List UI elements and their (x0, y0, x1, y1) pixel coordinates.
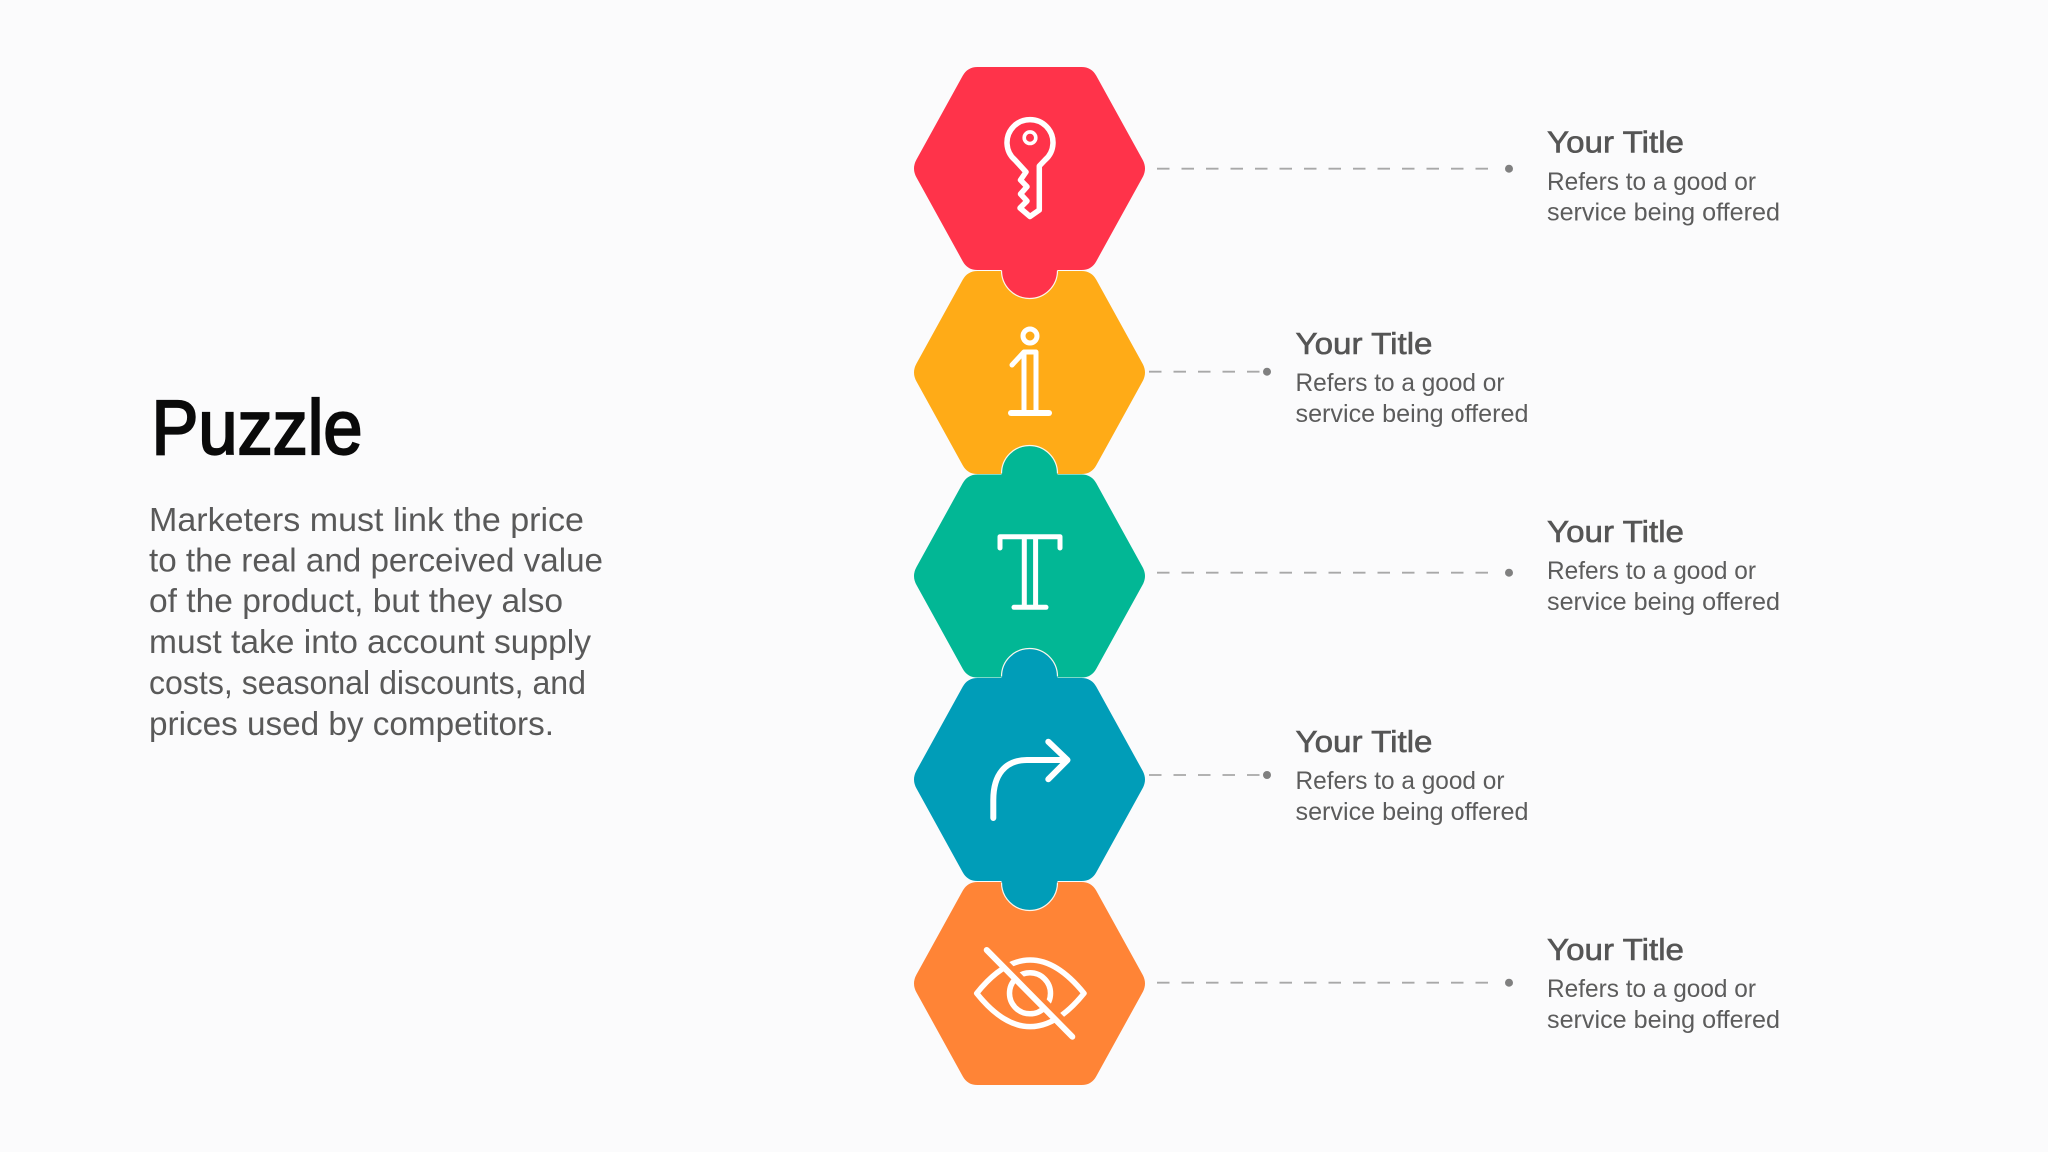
label 5 (1547, 932, 1780, 1034)
intro paragraph: costs, seasonal discounts, and (149, 664, 586, 701)
intro paragraph: prices used by competitors. (149, 705, 554, 742)
icon: key (1007, 120, 1053, 216)
puzzle tab: blue into green (1002, 648, 1058, 679)
hexagon: orange (914, 882, 1145, 1085)
hexagon: blue (914, 678, 1145, 881)
intro paragraph (149, 501, 603, 742)
connector 4 (1149, 771, 1271, 779)
intro paragraph: of the product, but they also (149, 582, 563, 619)
connector 2 (1149, 368, 1271, 376)
label 1: service being offered (1547, 198, 1780, 226)
connector 3 (1157, 569, 1513, 577)
label 1 (1547, 125, 1780, 226)
icon: info (1011, 329, 1049, 413)
icon: turn arrow (993, 742, 1068, 818)
label 3 (1547, 514, 1780, 616)
label 2: Refers to a good or (1296, 369, 1504, 397)
label 4: Refers to a good or (1296, 767, 1504, 795)
connector 5 (1157, 979, 1513, 987)
puzzle tab: blue into orange (1002, 880, 1058, 911)
hexagon: green (914, 474, 1145, 678)
intro paragraph: Marketers must link the price (149, 501, 584, 538)
connector 1 (1157, 165, 1513, 173)
label 2: service being offered (1296, 400, 1528, 428)
label 3: service being offered (1547, 588, 1780, 616)
label 4 (1296, 724, 1528, 826)
label 1: Refers to a good or (1547, 168, 1756, 196)
label 2 (1296, 326, 1528, 428)
intro paragraph: to the real and perceived value (149, 542, 603, 578)
hexagon: amber (914, 271, 1145, 474)
label 5: Your Title (1547, 932, 1684, 967)
icon: eye crossed out (977, 950, 1084, 1037)
puzzle tab: green into amber (1002, 446, 1058, 476)
title: Puzzle (152, 385, 362, 471)
label 4: service being offered (1296, 798, 1528, 826)
hexagon: red (914, 67, 1145, 270)
label 4: Your Title (1296, 724, 1432, 759)
label 3: Your Title (1547, 514, 1684, 549)
puzzle tab: red into amber (1002, 268, 1058, 299)
label 5: service being offered (1547, 1006, 1780, 1034)
label 5: Refers to a good or (1547, 975, 1756, 1003)
intro paragraph: must take into account supply (149, 623, 591, 660)
label 2: Your Title (1296, 326, 1432, 361)
icon: text T (1000, 537, 1060, 607)
label 1: Your Title (1547, 125, 1684, 160)
label 3: Refers to a good or (1547, 557, 1756, 585)
